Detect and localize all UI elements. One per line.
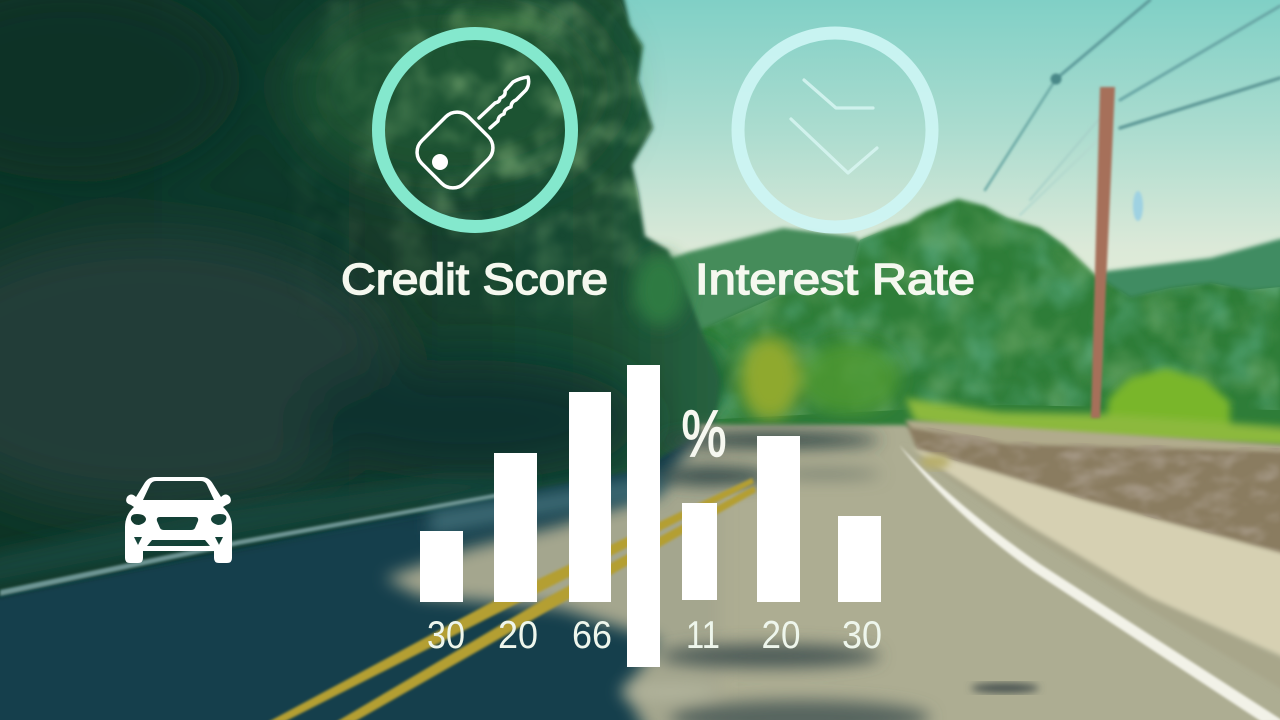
- bar value labels: 20: [498, 614, 538, 657]
- icon: car: [125, 477, 232, 563]
- heading: credit score: Credit Score: [341, 255, 608, 304]
- heading: interest rate: Interest Rate: [695, 255, 975, 304]
- bar value labels: 20: [762, 614, 800, 657]
- icon: interest rate chevrons: [738, 33, 932, 227]
- wires and insulator: [985, 0, 1280, 221]
- bars: [420, 365, 881, 667]
- hills: [660, 199, 1280, 430]
- bar value labels: 66: [572, 614, 612, 657]
- bar chart: [420, 365, 882, 667]
- stone wall and sidewalk: [901, 420, 1280, 700]
- road markings: [0, 445, 1280, 720]
- bar value labels: 30: [842, 614, 882, 657]
- percent symbol: %: [682, 396, 726, 470]
- bar value labels: [427, 614, 882, 657]
- bar value labels: 11: [686, 614, 720, 657]
- utility pole: [1091, 87, 1115, 418]
- road shadows: [430, 432, 930, 720]
- left tree mass: [0, 0, 720, 600]
- bar value labels: 30: [427, 614, 465, 657]
- sunlit road surface: [700, 425, 1280, 720]
- icon: credit score key: [378, 34, 572, 226]
- grass bank: [0, 478, 540, 588]
